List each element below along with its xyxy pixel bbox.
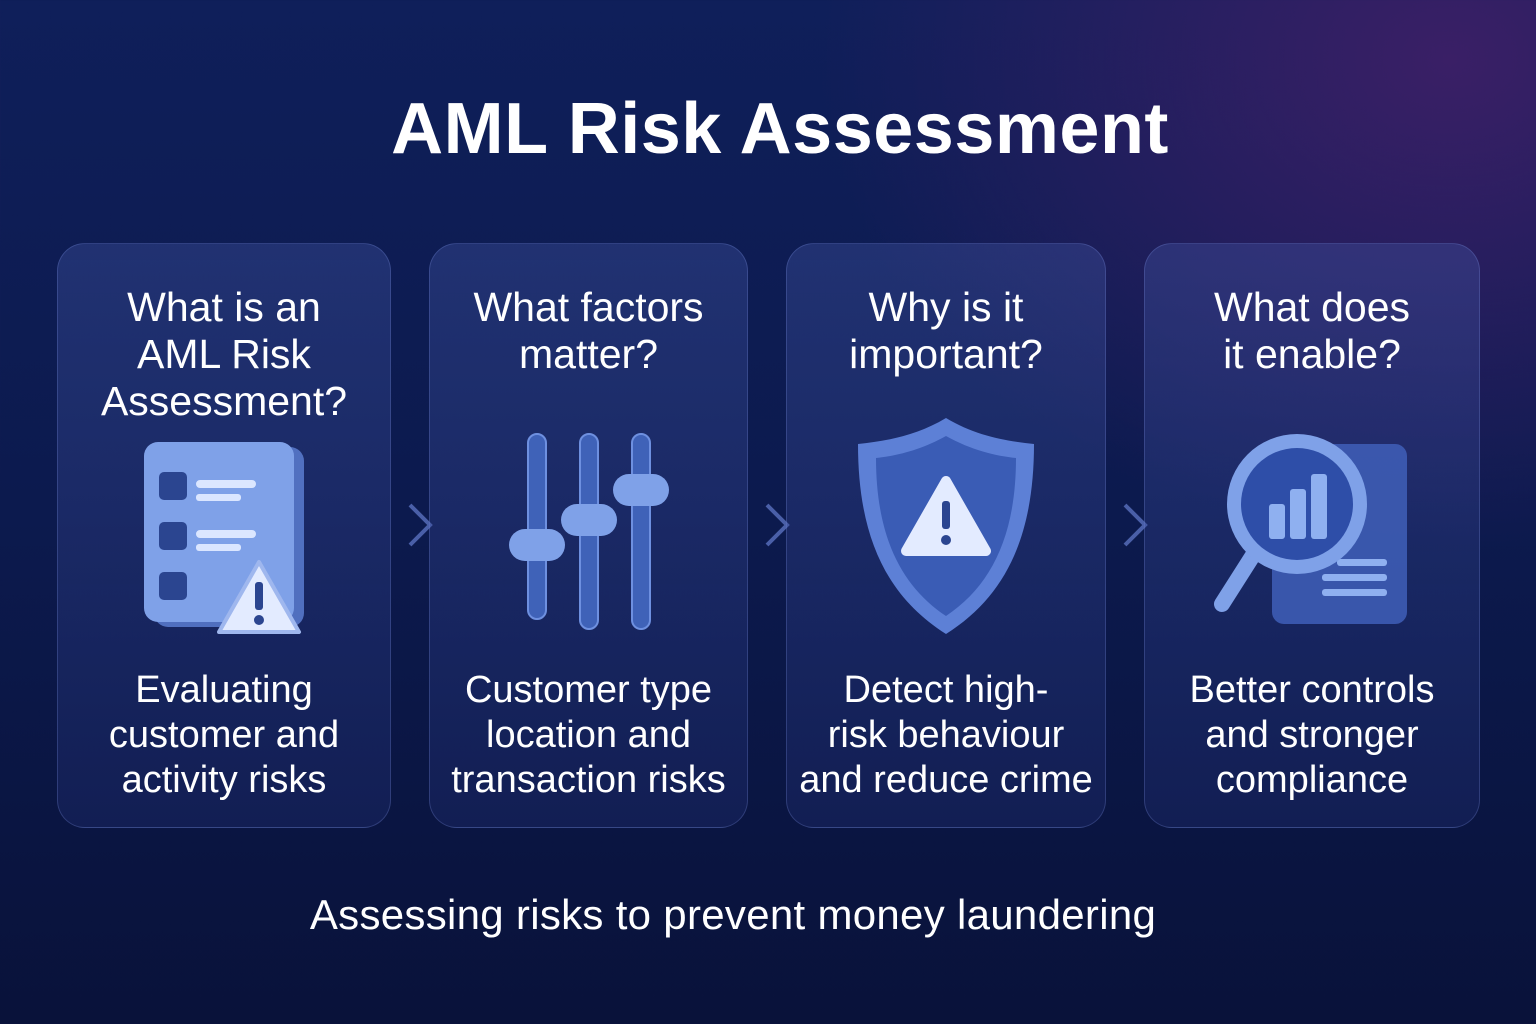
body 1: [109, 669, 339, 801]
body 3: [799, 669, 1093, 801]
heading 1: Assessment?: [101, 378, 347, 424]
heading 4: [1214, 284, 1410, 377]
body 1: customer and: [109, 714, 339, 756]
arrow 1: [408, 504, 433, 546]
body 3: risk behaviour: [828, 714, 1064, 756]
arrow 3: [1124, 504, 1148, 546]
panel: enable: [1144, 243, 1480, 828]
heading 1: [101, 284, 347, 424]
heading 2: [473, 284, 704, 377]
heading 4: What does: [1214, 284, 1410, 330]
heading 3: important?: [849, 331, 1043, 377]
heading 2: matter?: [519, 331, 658, 377]
icon: sliders: [509, 433, 669, 630]
heading 3: Why is it: [869, 284, 1023, 330]
icon: checklist: [144, 442, 304, 634]
body 3: and reduce crime: [799, 759, 1093, 801]
body 2: Customer type: [465, 669, 712, 711]
panel: factors: [429, 243, 748, 828]
heading 3: [849, 284, 1043, 377]
body 2: transaction risks: [451, 759, 726, 801]
body 4: and stronger: [1205, 714, 1419, 756]
footer tagline: Assessing risks to prevent money laundering: [310, 891, 1156, 938]
body 3: Detect high-: [844, 669, 1048, 711]
heading 4: it enable?: [1223, 331, 1401, 377]
panel: why: [786, 243, 1106, 828]
icon: magnifier with report: [1214, 434, 1407, 624]
heading 1: What is an: [127, 284, 321, 330]
panel: what is: [57, 243, 391, 828]
heading 2: What factors: [473, 284, 704, 330]
body 1: Evaluating: [135, 669, 313, 711]
icon: shield: [858, 418, 1034, 634]
body 2: [451, 669, 726, 801]
body 4: [1190, 669, 1434, 801]
title: AML Risk Assessment: [391, 89, 1169, 169]
body 2: location and: [486, 714, 691, 756]
heading 1: AML Risk: [137, 331, 311, 377]
body 1: activity risks: [122, 759, 326, 801]
arrow 2: [766, 504, 790, 546]
body 4: Better controls: [1190, 669, 1434, 711]
body 4: compliance: [1216, 759, 1408, 801]
